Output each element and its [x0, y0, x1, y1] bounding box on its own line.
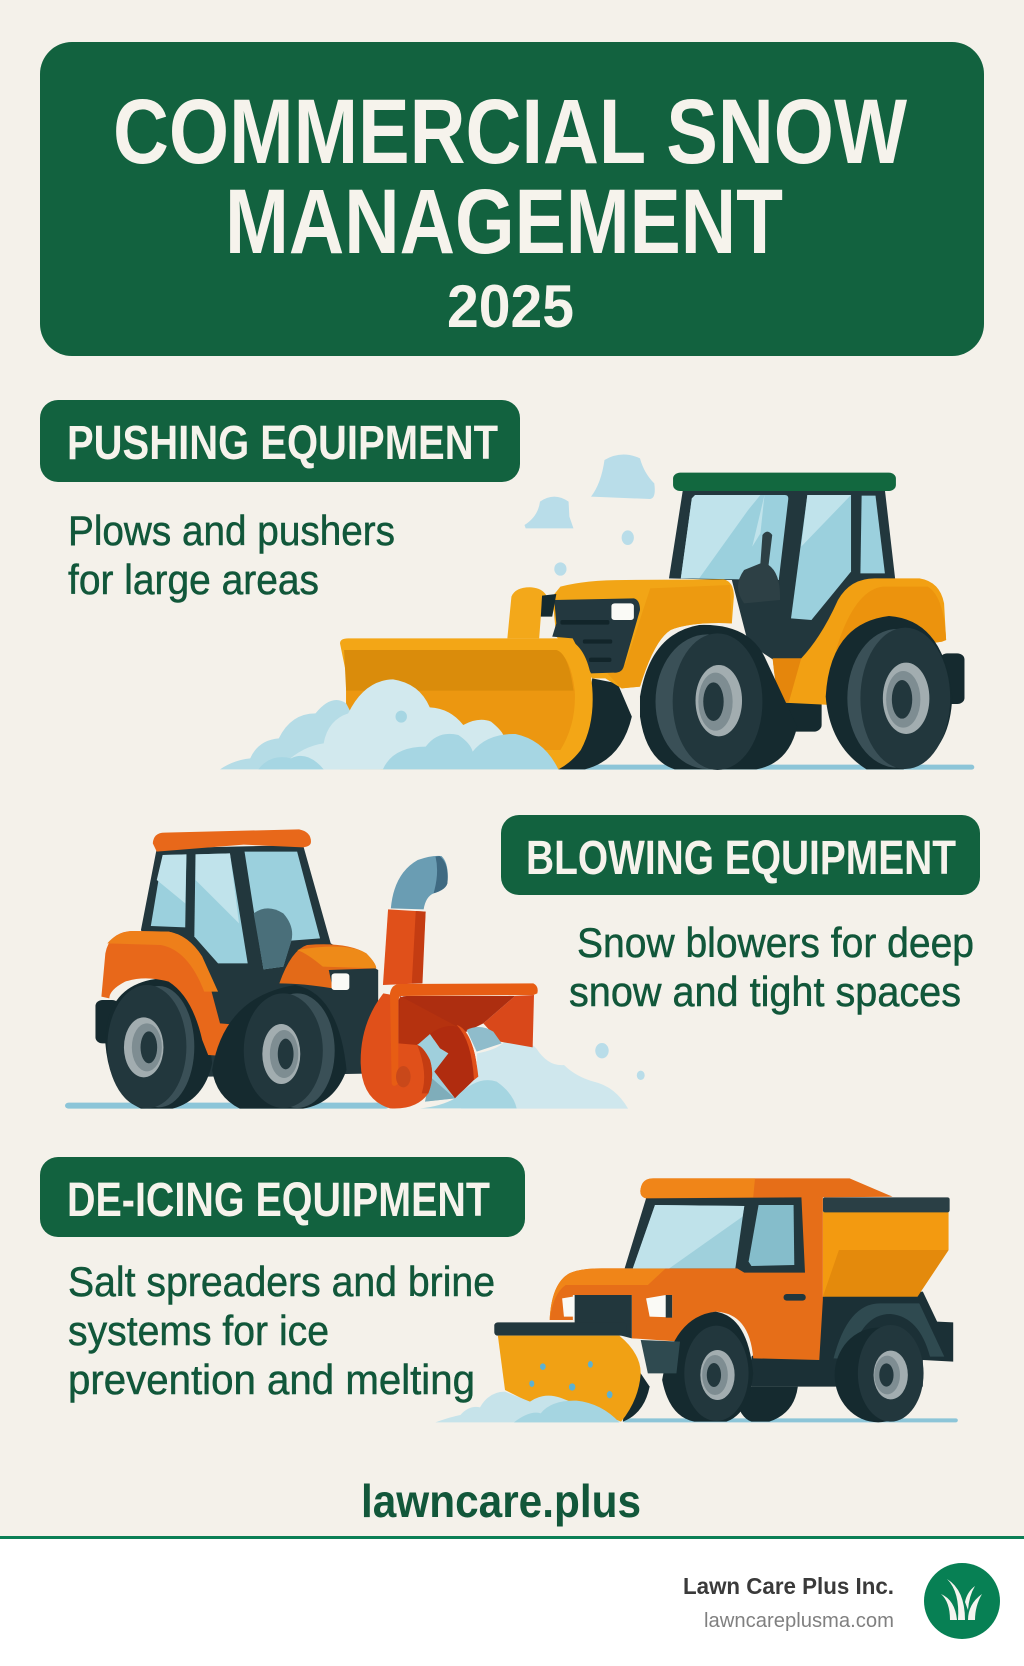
rear wheel: [826, 616, 952, 769]
title banner: [40, 42, 984, 356]
bumper: [641, 1340, 680, 1373]
cab body: [550, 1178, 892, 1360]
text: pushing description: for large areas: [68, 556, 319, 603]
website wordmark: lawncare.plus: [361, 1475, 641, 1527]
heading: pushing equipment: [40, 400, 520, 482]
text: blowing description: Snow blowers for deep: [577, 919, 974, 966]
text: de-icing description: systems for ice: [68, 1307, 329, 1354]
icon: salt spreader truck: [435, 1178, 958, 1422]
front wheel: [640, 625, 797, 770]
cab: [141, 829, 378, 1077]
snow opening: [417, 1034, 455, 1102]
housing back: [398, 995, 534, 1060]
plow arm: [507, 587, 556, 638]
snow puffs: [524, 455, 655, 576]
heading: pushing equipment: PUSHING EQUIPMENT: [67, 417, 498, 470]
housing side curl: [361, 983, 538, 1108]
plow blade: [340, 638, 593, 769]
plow: [494, 1322, 650, 1422]
rear wheel: [95, 978, 212, 1109]
cab: [669, 473, 911, 670]
ground line: [560, 765, 974, 770]
icon: orange snow blower tractor: [65, 829, 645, 1109]
hood: [552, 579, 734, 688]
text: pushing description: [68, 507, 395, 603]
rear chassis: [751, 1292, 953, 1387]
ground line: [623, 1418, 958, 1422]
company name: Lawn Care Plus Inc.: [683, 1573, 894, 1599]
text: blowing description: [569, 919, 974, 1015]
snow chute: [383, 856, 448, 985]
snow mound: [420, 1080, 517, 1108]
title banner: 2025: [447, 273, 574, 340]
rear fender: [101, 931, 240, 1057]
far wheel: [734, 1387, 798, 1422]
rear fender: [773, 578, 946, 705]
icon: blower housing and auger: [361, 983, 538, 1108]
company url: lawncareplusma.com: [704, 1610, 894, 1632]
heading: de-icing equipment: DE-ICING EQUIPMENT: [67, 1174, 490, 1227]
snow behind auger: [467, 1027, 502, 1052]
heading: blowing equipment: [501, 815, 980, 895]
text: pushing description: Plows and pushers: [68, 507, 395, 554]
heading: de-icing equipment: [40, 1157, 525, 1237]
icon: yellow plow tractor: [220, 455, 974, 770]
front wheel: [212, 985, 347, 1109]
rear wheel: [835, 1325, 924, 1422]
logo: [924, 1563, 1000, 1639]
snow pile: [435, 1392, 621, 1422]
text: de-icing description: prevention and melting: [68, 1356, 475, 1403]
front wheel: [662, 1312, 753, 1422]
title banner: MANAGEMENT: [225, 171, 783, 273]
ground line: [65, 1103, 389, 1109]
hood: [279, 944, 376, 990]
text: de-icing description: Salt spreaders and brine: [68, 1258, 495, 1305]
snow pile: [453, 1040, 645, 1109]
footer: [0, 1536, 1024, 1666]
far front wheel: [558, 678, 632, 769]
auger: [430, 1025, 478, 1098]
text: blowing description: snow and tight spaces: [569, 968, 961, 1015]
text: de-icing description: [68, 1258, 495, 1403]
salt hopper: [823, 1197, 950, 1297]
snow pile: [220, 679, 558, 769]
